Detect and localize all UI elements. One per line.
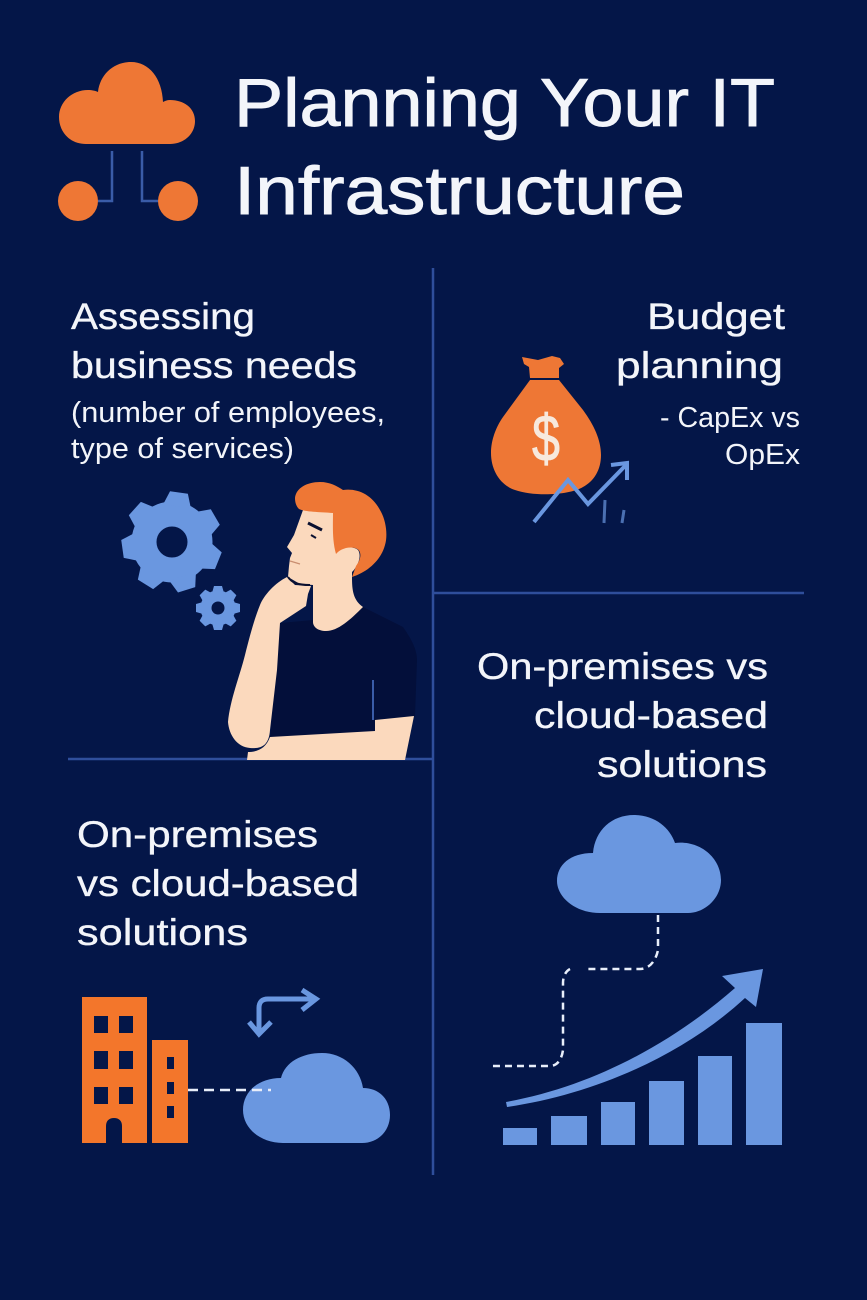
text: assessment details xyxy=(71,397,385,465)
heading: on-premises vs cloud-based solutions, left: vs cloud-based xyxy=(77,863,359,904)
heading: assessing business needs: Assessing xyxy=(71,296,255,337)
heading: budget planning: Budget xyxy=(647,296,786,337)
panel: on-premises vs cloud right xyxy=(477,646,782,1145)
icon: bidirectional arrows xyxy=(249,990,316,1034)
illustration: thinking person xyxy=(228,482,417,760)
icon: cloud network logo xyxy=(58,62,198,221)
heading: on-premises vs cloud-based solutions, left: solutions xyxy=(77,912,248,953)
icon: small gear xyxy=(196,586,240,630)
icon: large gear xyxy=(121,491,224,594)
text: assessment details: (number of employees, xyxy=(71,397,385,429)
panel: budget planning xyxy=(491,296,801,523)
panel: on-premises vs cloud left xyxy=(77,814,390,1143)
title: Infrastructure xyxy=(234,153,685,229)
growth arrow xyxy=(506,969,763,1107)
bar chart xyxy=(503,1023,782,1145)
heading: budget planning: planning xyxy=(616,345,783,386)
icon: blue cloud xyxy=(557,815,721,913)
heading: on-premises vs cloud-based solutions, left: On-premises xyxy=(77,814,318,855)
dashed connector xyxy=(490,915,658,1066)
icon: money bag: $ xyxy=(532,401,560,475)
heading: budget planning xyxy=(616,296,786,386)
text: capex vs opex: - CapEx vs xyxy=(660,402,800,434)
text: capex vs opex xyxy=(660,402,801,471)
title: Planning Your IT xyxy=(234,65,775,141)
heading: on-premises vs cloud-based solutions, right: On-premises vs xyxy=(477,646,768,687)
heading: assessing business needs xyxy=(71,296,357,386)
heading: assessing business needs: business needs xyxy=(71,345,357,386)
icon: rising trend arrow xyxy=(534,463,627,523)
text: capex vs opex: OpEx xyxy=(725,439,801,471)
icon: money bag xyxy=(491,356,601,494)
heading: on-premises vs cloud-based solutions, right xyxy=(477,646,768,785)
dashed link xyxy=(188,1089,271,1091)
heading: on-premises vs cloud-based solutions, right: cloud-based xyxy=(534,695,768,736)
heading: on-premises vs cloud-based solutions, right: solutions xyxy=(597,744,767,785)
icon: cloud xyxy=(243,1053,390,1143)
icon: office buildings xyxy=(82,997,188,1143)
text: assessment details: type of services) xyxy=(71,433,294,465)
heading: on-premises vs cloud-based solutions, left xyxy=(77,814,359,953)
title xyxy=(234,65,775,229)
panel: assessing business needs xyxy=(71,296,417,760)
